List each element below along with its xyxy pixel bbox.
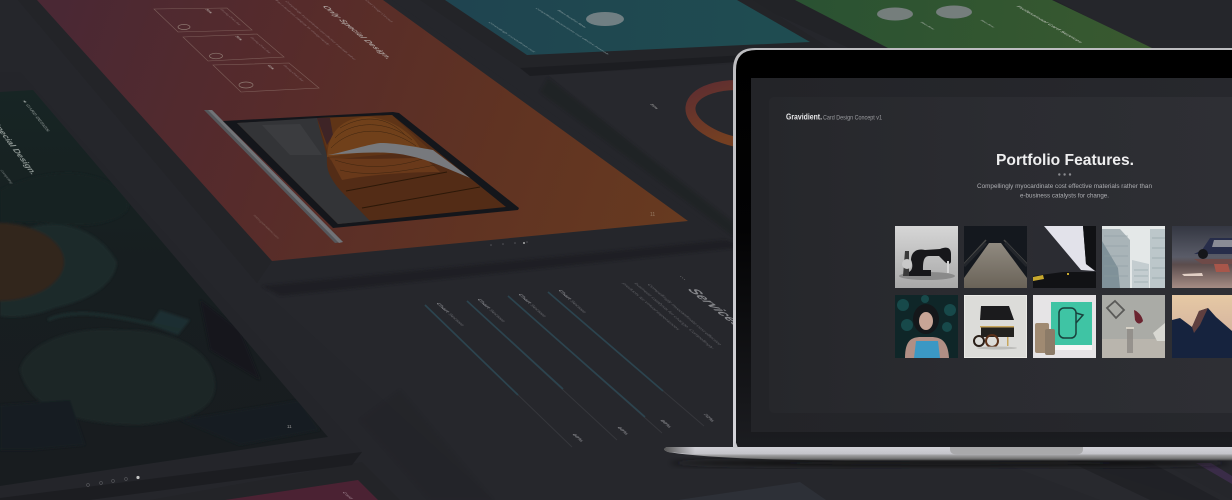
text block: business catalysts for change. Compellingly (632, 283, 715, 349)
portfolio thumb: wooden bridge (964, 226, 1027, 288)
bar chart (425, 292, 704, 447)
text block: products for virtual experiences (620, 283, 681, 331)
portfolio thumb: sewing machine (895, 226, 958, 288)
text block: Card Design Concept (364, 0, 394, 22)
panel: pink slide (150, 462, 400, 500)
portfolio thumb: bird on chair (1102, 295, 1165, 358)
laptop screen (751, 78, 1232, 432)
bar labels: Chart Sectors (475, 299, 507, 322)
feature box labels: Strong Chart Bar (219, 9, 243, 26)
laptop shadow (670, 459, 1230, 467)
panel: teal slide: Compellingly myocardinate cost effective materials (534, 8, 610, 55)
eyebrow: ★ CARD DESIGN (20, 100, 51, 132)
text block: Compellingly myocardinate cost effective materials rather (284, 1, 358, 61)
brand line (786, 112, 882, 122)
panel: orange slide (18, 0, 725, 283)
title dots (1058, 173, 1071, 176)
feature boxes (154, 8, 319, 92)
tablet device (204, 110, 519, 243)
bar values (570, 414, 715, 442)
bar values: 72% (701, 414, 715, 422)
footer url: www.gravidient.com (252, 215, 280, 239)
bar values: 60% (615, 427, 629, 435)
screen card (769, 97, 1232, 413)
feature box labels: 45k (266, 65, 277, 70)
portfolio thumb: architecture (1033, 226, 1096, 288)
panel: green slide: Start Now (919, 22, 936, 30)
brand line: Card Design Concept v1 (823, 114, 882, 122)
panel: services frame (262, 240, 1232, 500)
panel: green slide (745, 0, 1170, 60)
portfolio thumb: food cart (964, 295, 1027, 358)
heading: Only Special Design. (320, 5, 394, 60)
bar labels: Chart Sectors (556, 290, 588, 313)
page number: 11 (650, 212, 655, 218)
panel: services content (425, 276, 748, 447)
tablet screen wood (237, 115, 506, 224)
panel: green slide: Professional Card Services (1014, 6, 1084, 43)
text block: Compellingly myocardinate cost effective (645, 284, 723, 346)
panel: plant slide (0, 72, 362, 500)
feature box labels (204, 9, 306, 82)
feature box labels: 30k (234, 36, 245, 41)
portfolio thumb: teal poster (1033, 295, 1096, 358)
subtitle: Compellingly myocardinate cost effective materials rather than (977, 183, 1152, 190)
chart: ring (687, 78, 813, 152)
bar labels: Chart Sectors (516, 294, 548, 317)
pager dots (490, 241, 528, 246)
page number: 11 (287, 424, 292, 429)
label: percent: 25% (649, 104, 659, 110)
text block: than e-business catalysts for change rapidly (274, 0, 331, 46)
feature box labels: 35k (204, 9, 215, 14)
laptop notch (950, 447, 1083, 454)
small marks: • • • (678, 276, 687, 281)
laptop lid edge (733, 48, 1232, 452)
subtitle: e-business catalysts for change. (1020, 192, 1109, 200)
bar labels: Chart Sectors (434, 303, 466, 326)
tablet screen page (328, 143, 470, 178)
plant photo (0, 80, 340, 500)
subtitle (977, 183, 1152, 200)
title: Portfolio Features. (996, 152, 1134, 169)
bottom right panels (678, 462, 1232, 500)
feature box labels: Strong Chart Bar (249, 37, 273, 54)
feature box labels: Strong Chart Bar (282, 65, 306, 82)
pager dots (87, 476, 140, 486)
heading: Services (683, 288, 748, 328)
portfolio thumb: white towers (1102, 226, 1165, 288)
panel: teal slide: Start Service Now (556, 10, 587, 28)
laptop base (664, 440, 1232, 460)
laptop (664, 48, 1232, 467)
text block (274, 0, 394, 61)
panel: teal slide: Compellingly myocardinate cost (487, 22, 536, 52)
bar labels (434, 290, 588, 326)
portfolio thumb: car (1172, 226, 1232, 288)
panel: donut chart slide (540, 58, 1000, 236)
brand line: Gravidient. (786, 112, 822, 122)
laptop bezel (736, 50, 1232, 452)
panel: teal slide (420, 0, 840, 76)
bar values: 60% (570, 434, 584, 442)
portfolio thumb: mountain sunset (1172, 295, 1232, 358)
bar values: 80% (658, 420, 672, 428)
panel: green slide: Start Now (979, 20, 996, 28)
panel: pink slide: Card (340, 492, 354, 499)
portfolio thumb: woman in leaves (895, 295, 958, 358)
tablet screen gray fold (237, 118, 370, 224)
